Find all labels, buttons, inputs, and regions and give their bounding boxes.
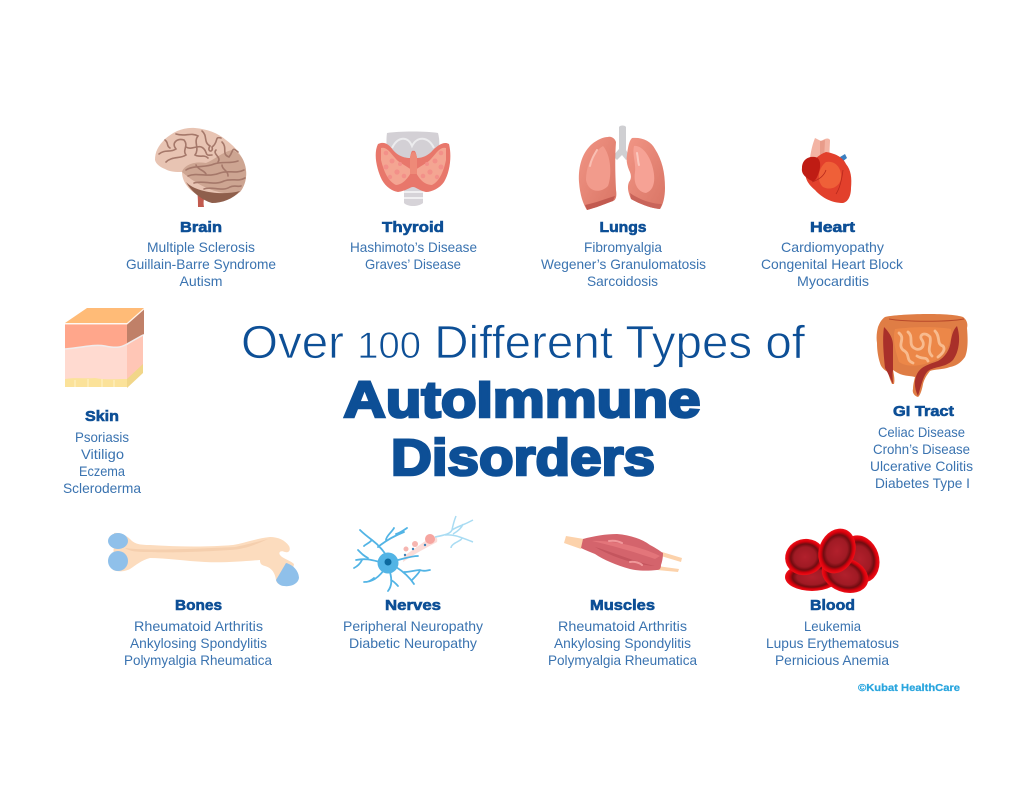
conditions list: Wegener’s Granulomatosis: [541, 256, 706, 272]
title: AutoImmune: [344, 371, 700, 428]
icon: lungs: [579, 126, 665, 210]
heading: Brain: Brain: [180, 219, 222, 236]
heading: Skin: Skin: [85, 408, 119, 425]
conditions list: [766, 618, 899, 668]
icon: femur bone: [108, 533, 299, 586]
conditions list: Hashimoto’s Disease: [350, 239, 477, 255]
conditions list: Psoriasis: [75, 429, 129, 445]
conditions list: Cardiomyopathy: [781, 239, 884, 255]
conditions list: Autism: [180, 273, 222, 289]
conditions list: Rheumatoid Arthritis: [558, 618, 687, 634]
panel: muscles: [548, 534, 697, 668]
conditions list: Polymyalgia Rheumatica: [124, 652, 272, 668]
conditions list: Crohn’s Disease: [873, 441, 970, 457]
icon: thyroid: [376, 132, 450, 206]
conditions list: Leukemia: [804, 618, 861, 634]
panel: GI tract: [870, 314, 973, 491]
conditions list: Rheumatoid Arthritis: [134, 618, 263, 634]
icon: red blood cells: [781, 523, 885, 599]
conditions list: Congenital Heart Block: [761, 256, 904, 272]
conditions list: Guillain-Barre Syndrome: [126, 256, 276, 272]
conditions list: Graves’ Disease: [365, 256, 461, 272]
conditions list: Multiple Sclerosis: [147, 239, 255, 255]
icon: intestines: [877, 314, 968, 397]
conditions list: Eczema: [79, 463, 125, 479]
panel: heart: [761, 138, 904, 289]
panel: lungs: [541, 126, 706, 289]
title: Disorders: [391, 429, 655, 486]
conditions list: Lupus Erythematosus: [766, 635, 899, 651]
conditions list: Scleroderma: [63, 480, 141, 496]
panel: brain: [126, 128, 276, 289]
conditions list: [541, 239, 706, 289]
panel: bones: [108, 533, 299, 668]
copyright credit: ©Kubat HealthCare: [858, 682, 960, 694]
heading: Bones: Bones: [175, 597, 222, 614]
icon: brain: [155, 128, 246, 207]
conditions list: Pernicious Anemia: [775, 652, 889, 668]
icon: muscle: [564, 534, 682, 572]
conditions list: [124, 618, 272, 668]
panel: thyroid: [350, 132, 477, 272]
conditions list: [870, 424, 973, 491]
conditions list: [350, 239, 477, 272]
heading: Thyroid: Thyroid: [382, 219, 444, 236]
conditions list: [343, 618, 483, 651]
conditions list: Polymyalgia Rheumatica: [548, 652, 697, 668]
heading: Nerves: Nerves: [385, 597, 441, 614]
title: Over 100 Different Types of: [241, 316, 805, 368]
conditions list: [548, 618, 697, 668]
conditions list: [126, 239, 276, 289]
conditions list: Ankylosing Spondylitis: [130, 635, 267, 651]
conditions list: [761, 239, 904, 289]
icon: heart: [802, 138, 851, 203]
conditions list: Peripheral Neuropathy: [343, 618, 483, 634]
panel: nerves: [343, 516, 483, 651]
icon: skin layers: [65, 308, 144, 388]
conditions list: Ankylosing Spondylitis: [554, 635, 691, 651]
heading: Muscles: Muscles: [590, 597, 655, 614]
conditions list: Diabetes Type I: [875, 475, 970, 491]
conditions list: [63, 429, 141, 496]
panel: blood: [766, 523, 899, 668]
conditions list: Celiac Disease: [878, 424, 965, 440]
conditions list: Myocarditis: [797, 273, 869, 289]
heading: Heart: Heart: [810, 219, 855, 236]
title: [241, 316, 805, 486]
conditions list: Sarcoidosis: [587, 273, 658, 289]
conditions list: Ulcerative Colitis: [870, 458, 973, 474]
icon: neuron: [354, 516, 473, 591]
conditions list: Diabetic Neuropathy: [349, 635, 477, 651]
panel: skin: [63, 308, 144, 496]
conditions list: Vitiligo: [81, 446, 124, 462]
heading: GI Tract: GI Tract: [893, 403, 954, 420]
heading: Blood: Blood: [810, 597, 855, 614]
heading: Lungs: Lungs: [600, 219, 646, 236]
conditions list: Fibromyalgia: [584, 239, 662, 255]
